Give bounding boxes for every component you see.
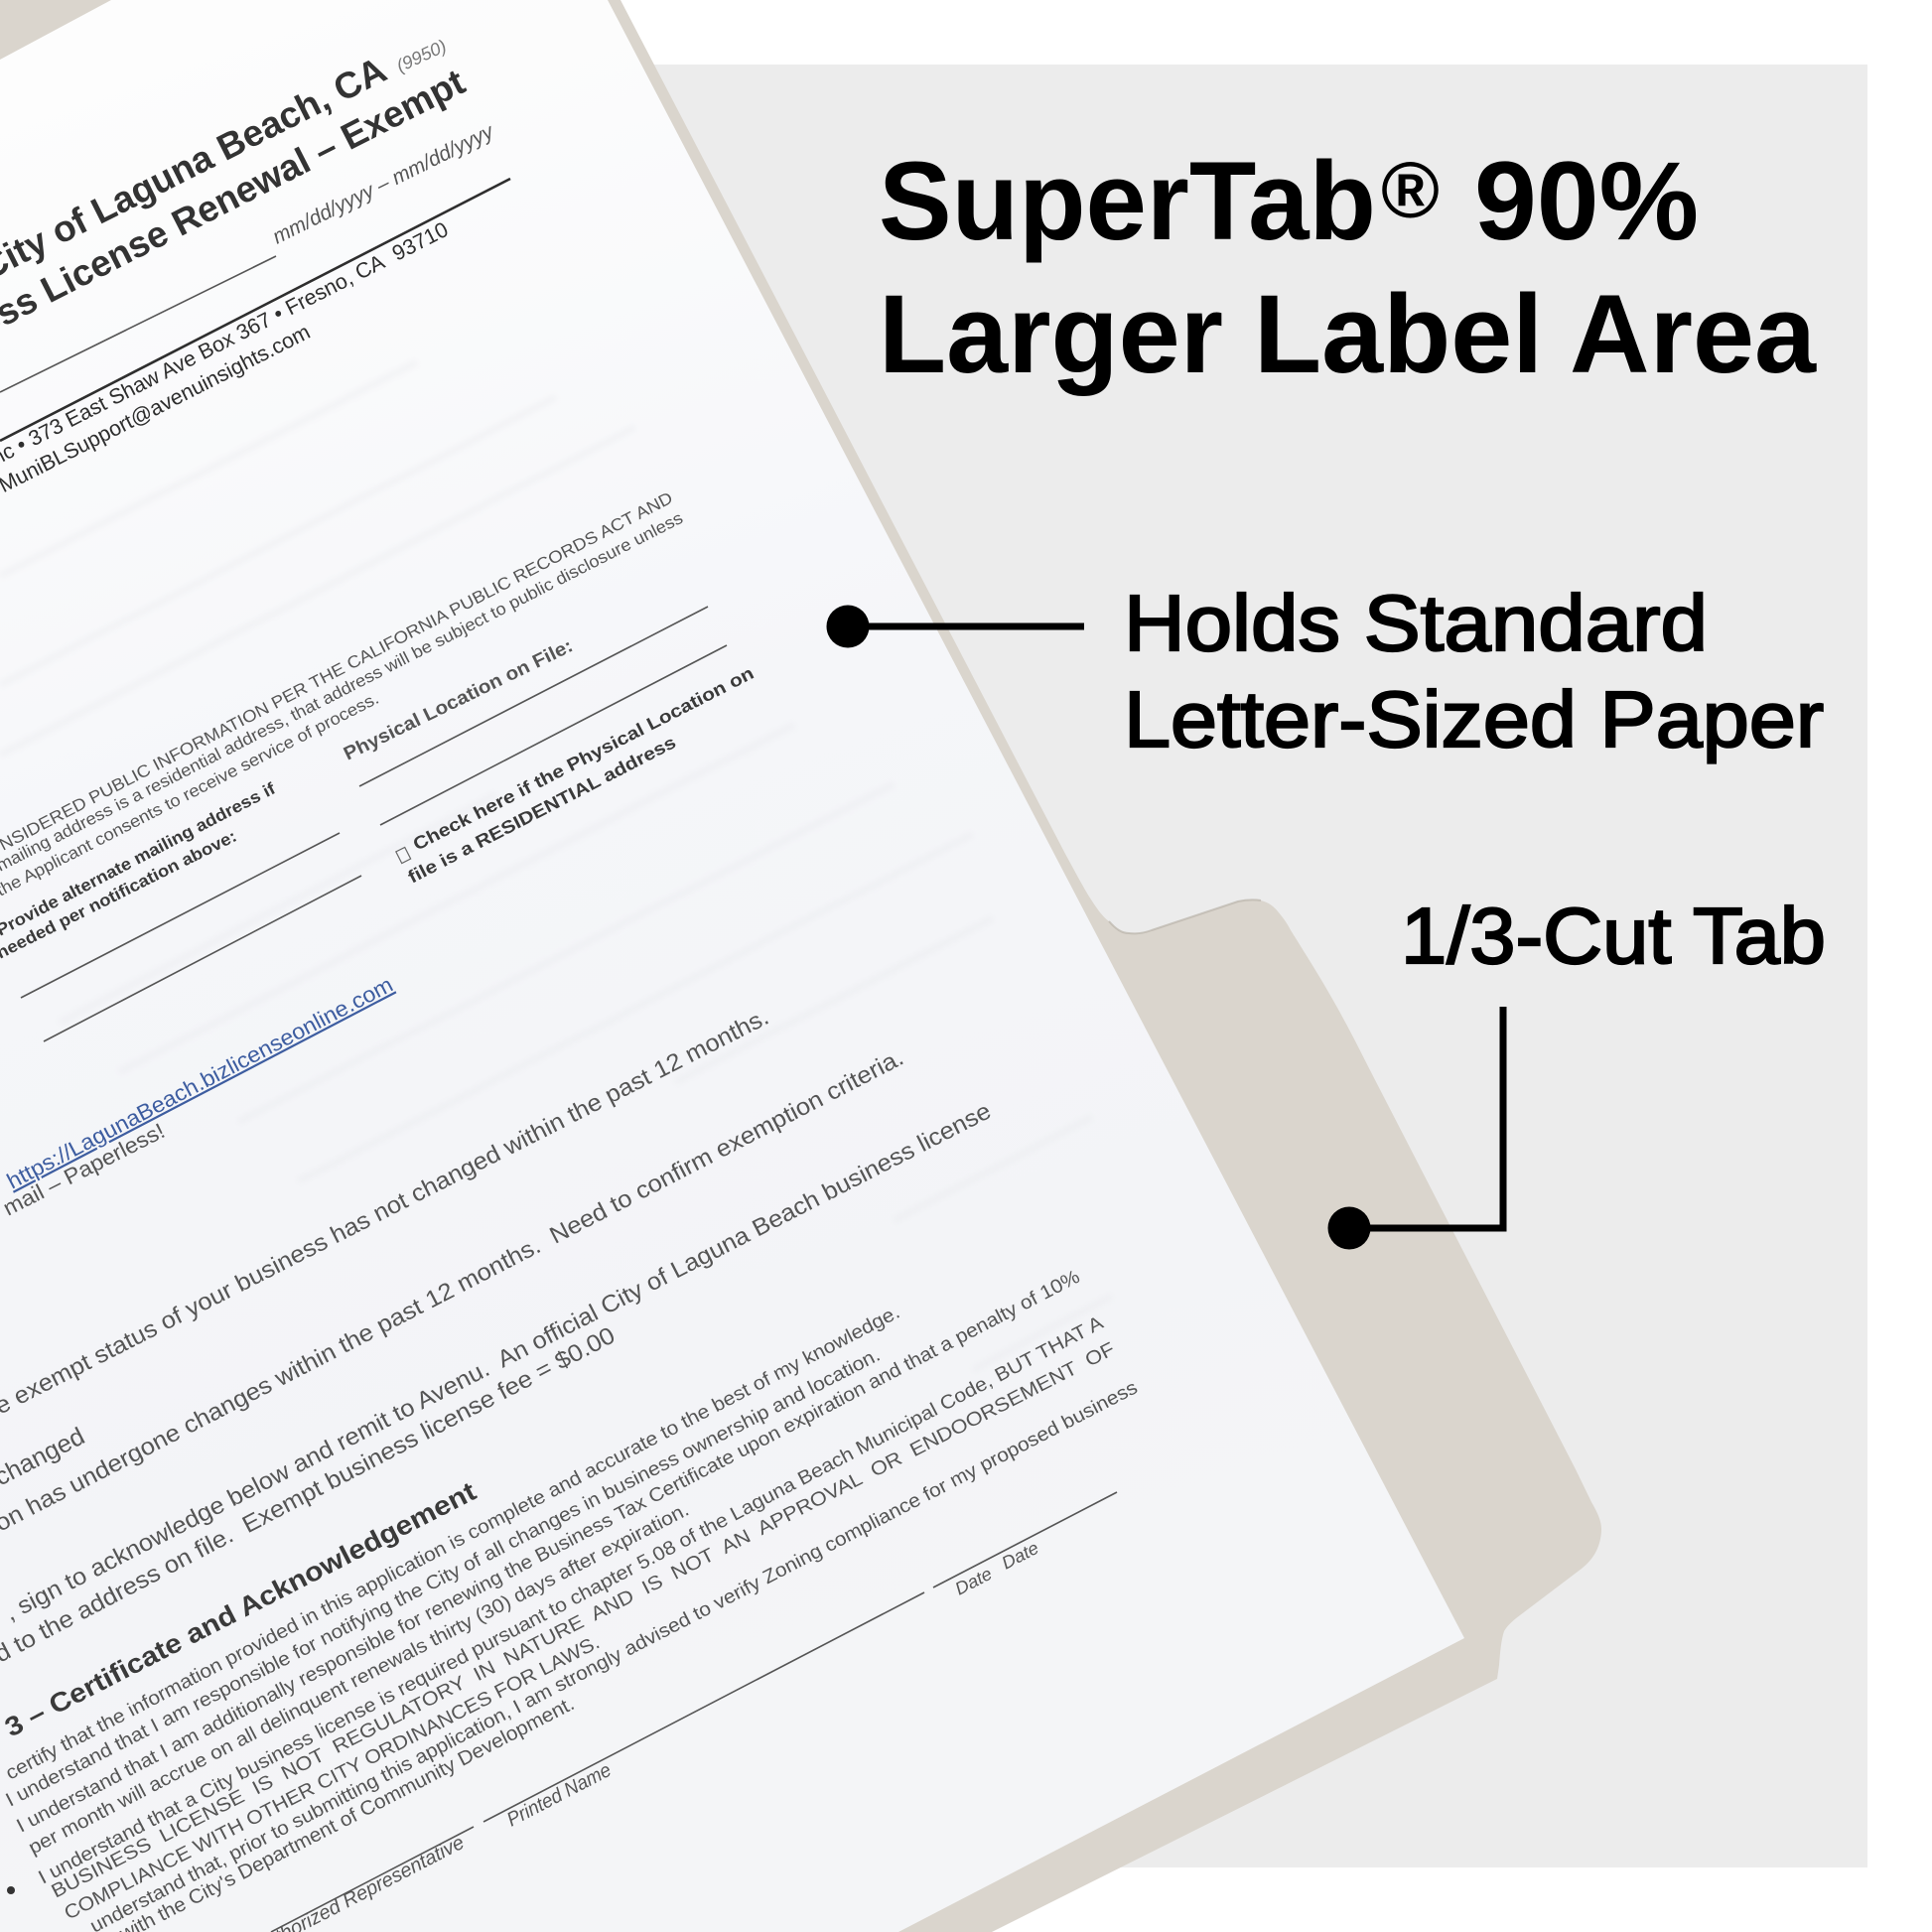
physical location label: Physical Location on File: (341, 635, 576, 764)
fee line: d to the address on file. Exempt business license fee = $0.00 (0, 1322, 620, 1668)
certification line 5: I understand that a City business license is required pursuant to chapter 5.08 of the Laguna Beach Municipal Code, BUT THAT A (35, 1311, 1107, 1888)
section heading: 3 – Certificate and Acknowledgement (0, 1476, 481, 1742)
public records notice line 1: NSIDERED PUBLIC INFORMATION PER THE CALIFORNIA PUBLIC RECORDS ACT AND (0, 488, 676, 855)
heading (879, 139, 1817, 396)
acknowledge line: , sign to acknowledge below and remit to Avenu. An official City of Laguna Beach business license (0, 1098, 996, 1626)
callout text: 1/3-Cut Tab (1401, 892, 1826, 980)
certification line 7: COMPLIANCE WITH OTHER CITY ORDINANCES FOR LAWS. (61, 1631, 604, 1924)
bullet (7, 1886, 15, 1894)
printed name caption: Printed Name (503, 1759, 615, 1831)
alternate mailing address prompt: Provide alternate mailing address if (0, 779, 279, 940)
callout text (1124, 579, 1824, 763)
certification line 2: I understand that I am responsible for notifying the City of all changes in business ownership and location. (2, 1344, 884, 1811)
heading line 1: 90%: 90% (1474, 139, 1699, 263)
certification line 1: certify that the information provided in this application is complete and accurate to the best of my knowledge. (2, 1302, 903, 1784)
certification line 4: per month will accrue on all delinquent renewals thirty (30) days after expiration. (25, 1499, 693, 1859)
certification line 8: understand that, prior to submitting this application, I am strongly advised to verify Zoning compliance for my proposed business (86, 1376, 1142, 1932)
website link: https://LagunaBeach.bizlicenseonline.com (3, 972, 397, 1193)
date caption 2: Date (999, 1538, 1041, 1574)
date range: mm/dd/yyyy – mm/dd/yyyy (269, 119, 498, 248)
date caption 1: Date (952, 1564, 995, 1599)
sheet of letter paper (0, 0, 1464, 1932)
callout dot and leader line (826, 606, 1084, 647)
folder tab top edge shadow (1109, 899, 1261, 933)
faint show-through text on paper (0, 362, 1112, 1370)
document code: (9950) (393, 36, 450, 76)
residential check text line 1: Check here if the Physical Location on (410, 663, 757, 855)
callout: 1/3-cut tab (1328, 892, 1826, 1249)
certification line 6: BUSINESS LICENSE IS NOT REGULATORY IN NATURE AND IS NOT AN APPROVAL OR ENDOORSEMENT OF (48, 1338, 1119, 1902)
document text on paper (0, 36, 1142, 1932)
callout text: Letter-Sized Paper (1124, 675, 1824, 763)
certification line 3: I understand that I am additionally responsible for renewing the Business Tax Certificate upon expiration and that a penalty of 10% (13, 1266, 1083, 1837)
residential check text line 2: file is a RESIDENTIAL address (405, 732, 679, 888)
support email: MuniBLSupport@avenuinsights.com (0, 320, 314, 497)
callout text: Holds Standard (1124, 579, 1708, 667)
heading line 2: Larger Label Area (879, 272, 1817, 396)
panel: grey background (556, 65, 1867, 1867)
undergone changes line: on has undergone changes within the past 12 months. Need to confirm exemption criteria. (0, 1044, 908, 1537)
public records notice line 2: mailing address is a residential address, that address will be subject to public disclosure unless (0, 508, 686, 876)
public records notice line 3: the Applicant consents to receive service of process. (0, 689, 382, 900)
callout: holds standard letter-sized paper (826, 579, 1824, 763)
document rules (0, 179, 1117, 1932)
paperless note: mail – Paperless! (0, 1118, 169, 1220)
callout dot and elbow leader line (1328, 1007, 1503, 1249)
registered mark: ® (1381, 146, 1440, 234)
residential checkbox (396, 847, 411, 864)
alternate mailing address prompt line 2: needed per notification above: (0, 827, 239, 963)
heading line 1: SuperTab: SuperTab (879, 139, 1376, 263)
exempt status line: e exempt status of your business has not changed within the past 12 months. (0, 1004, 773, 1420)
